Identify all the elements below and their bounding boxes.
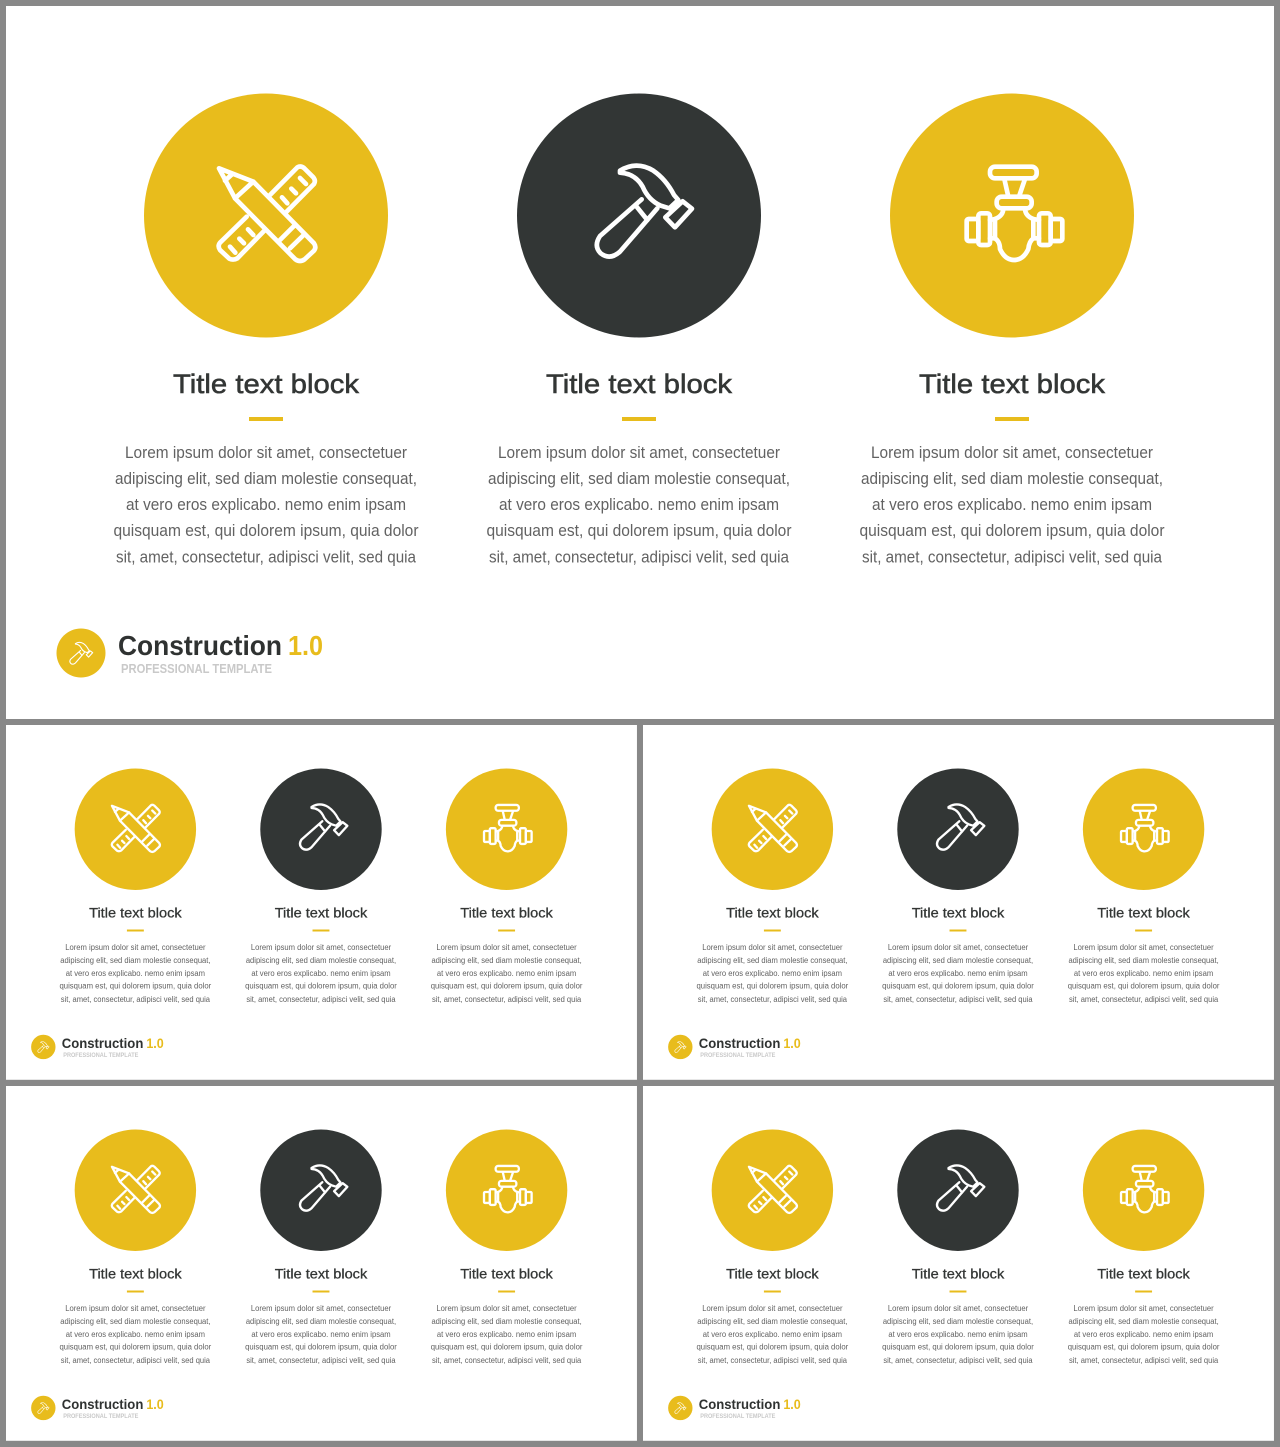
accent bar bbox=[950, 1291, 966, 1293]
brand logo: 1.0 bbox=[783, 1036, 801, 1051]
body text: adipiscing elit, sed diam molestie consequat, bbox=[431, 956, 582, 965]
brand logo bbox=[31, 1396, 164, 1420]
body text: at vero eros explicabo. nemo enim ipsam bbox=[437, 969, 576, 978]
body text bbox=[882, 1304, 1034, 1365]
icon: hammer bbox=[260, 1130, 382, 1251]
body text bbox=[59, 1304, 212, 1365]
icon: hammer bbox=[897, 1130, 1019, 1251]
accent bar bbox=[1135, 1291, 1152, 1293]
heading: Title text block bbox=[460, 1267, 553, 1282]
body text: adipiscing elit, sed diam molestie consequat, bbox=[431, 1317, 582, 1326]
icon: pipe valve bbox=[890, 94, 1134, 338]
body text: at vero eros explicabo. nemo enim ipsam bbox=[703, 969, 842, 978]
body text: Lorem ipsum dolor sit amet, consectetuer bbox=[702, 943, 843, 952]
body text bbox=[486, 444, 792, 566]
body text: quisquam est, qui dolorem ipsum, quia dolor bbox=[882, 1343, 1034, 1352]
icon: pipe valve bbox=[1083, 769, 1204, 890]
heading: Title text block bbox=[919, 369, 1106, 399]
body text: at vero eros explicabo. nemo enim ipsam bbox=[251, 1330, 391, 1339]
body text bbox=[1068, 1304, 1220, 1365]
body text: quisquam est, qui dolorem ipsum, quia dolor bbox=[696, 982, 849, 991]
brand logo: Construction bbox=[62, 1036, 143, 1051]
accent bar bbox=[127, 1291, 144, 1293]
body text: at vero eros explicabo. nemo enim ipsam bbox=[888, 1330, 1028, 1339]
icon: pencil and ruler bbox=[712, 769, 833, 890]
body text bbox=[860, 444, 1165, 566]
column 3: valve bbox=[431, 1130, 583, 1365]
body text: quisquam est, qui dolorem ipsum, quia dolor bbox=[696, 1343, 849, 1352]
body text bbox=[114, 444, 419, 566]
body text: sit, amet, consectetur, adipisci velit, sed quia bbox=[883, 995, 1033, 1004]
column 3: valve bbox=[431, 769, 583, 1004]
brand logo bbox=[31, 1035, 164, 1059]
body text: adipiscing elit, sed diam molestie consequat, bbox=[246, 956, 396, 965]
body text: at vero eros explicabo. nemo enim ipsam bbox=[66, 1330, 205, 1339]
body text: at vero eros explicabo. nemo enim ipsam bbox=[888, 969, 1028, 978]
heading: Title text block bbox=[89, 1267, 182, 1282]
heading: Title text block bbox=[912, 906, 1005, 921]
heading: Title text block bbox=[726, 1267, 819, 1282]
body text: sit, amet, consectetur, adipisci velit, sed quia bbox=[1069, 1356, 1219, 1365]
body text: sit, amet, consectetur, adipisci velit, sed quia bbox=[489, 548, 790, 566]
column 2: hammer bbox=[245, 1130, 397, 1365]
body text: Lorem ipsum dolor sit amet, consectetuer bbox=[1073, 943, 1214, 952]
brand logo: Construction bbox=[699, 1036, 780, 1051]
heading: Title text block bbox=[1097, 906, 1190, 921]
heading: Title text block bbox=[275, 906, 368, 921]
icon: pencil and ruler bbox=[75, 1130, 196, 1251]
icon: pipe valve bbox=[446, 769, 567, 890]
body text: at vero eros explicabo. nemo enim ipsam bbox=[1074, 969, 1213, 978]
body text bbox=[882, 943, 1034, 1004]
body text: adipiscing elit, sed diam molestie consequat, bbox=[60, 1317, 211, 1326]
body text: sit, amet, consectetur, adipisci velit, sed quia bbox=[432, 1356, 582, 1365]
icon: pipe valve bbox=[1083, 1130, 1204, 1251]
body text: adipiscing elit, sed diam molestie consequat, bbox=[883, 956, 1033, 965]
brand logo bbox=[56, 628, 323, 678]
body text bbox=[431, 943, 583, 1004]
brand logo: Construction bbox=[118, 630, 282, 661]
body text: Lorem ipsum dolor sit amet, consectetuer bbox=[702, 1304, 843, 1313]
body text: quisquam est, qui dolorem ipsum, quia dolor bbox=[59, 1343, 212, 1352]
body text: sit, amet, consectetur, adipisci velit, sed quia bbox=[698, 1356, 847, 1365]
body text: Lorem ipsum dolor sit amet, consectetuer bbox=[871, 444, 1153, 462]
column 3: valve bbox=[1068, 769, 1220, 1004]
accent bar bbox=[313, 1291, 329, 1293]
body text: at vero eros explicabo. nemo enim ipsam bbox=[1074, 1330, 1213, 1339]
brand logo bbox=[668, 1035, 801, 1059]
body text: adipiscing elit, sed diam molestie consequat, bbox=[697, 956, 848, 965]
body text: at vero eros explicabo. nemo enim ipsam bbox=[703, 1330, 842, 1339]
body text bbox=[696, 943, 849, 1004]
brand logo: PROFESSIONAL TEMPLATE bbox=[700, 1052, 775, 1059]
body text bbox=[431, 1304, 583, 1365]
panel: large slide bbox=[6, 6, 1274, 719]
body text: Lorem ipsum dolor sit amet, consectetuer bbox=[251, 943, 391, 952]
body text bbox=[696, 1304, 849, 1365]
heading: Title text block bbox=[912, 1267, 1005, 1282]
heading: Title text block bbox=[89, 906, 182, 921]
body text: adipiscing elit, sed diam molestie consequat, bbox=[883, 1317, 1033, 1326]
body text: Lorem ipsum dolor sit amet, consectetuer bbox=[436, 943, 577, 952]
accent bar bbox=[950, 930, 966, 932]
column 1: pencil and ruler bbox=[696, 769, 849, 1004]
column 2: hammer bbox=[245, 769, 397, 1004]
brand logo: 1.0 bbox=[783, 1397, 801, 1412]
icon: pencil and ruler bbox=[712, 1130, 833, 1251]
accent bar bbox=[498, 930, 515, 932]
column 1: pencil and ruler bbox=[59, 1130, 212, 1365]
panel: small slide bottom right bbox=[643, 1086, 1274, 1441]
icon: pipe valve bbox=[446, 1130, 567, 1251]
column 1: pencil and ruler bbox=[59, 769, 212, 1004]
accent bar bbox=[313, 930, 329, 932]
heading: Title text block bbox=[173, 369, 360, 399]
body text: Lorem ipsum dolor sit amet, consectetuer bbox=[1073, 1304, 1214, 1313]
column 2: hammer bbox=[882, 769, 1034, 1004]
body text: sit, amet, consectetur, adipisci velit, sed quia bbox=[61, 995, 210, 1004]
body text: Lorem ipsum dolor sit amet, consectetuer bbox=[125, 444, 407, 462]
body text: Lorem ipsum dolor sit amet, consectetuer bbox=[498, 444, 780, 462]
heading: Title text block bbox=[275, 1267, 368, 1282]
heading: Title text block bbox=[1097, 1267, 1190, 1282]
brand logo: PROFESSIONAL TEMPLATE bbox=[63, 1052, 138, 1059]
body text: Lorem ipsum dolor sit amet, consectetuer bbox=[251, 1304, 391, 1313]
body text: at vero eros explicabo. nemo enim ipsam bbox=[499, 496, 779, 514]
body text bbox=[1068, 943, 1220, 1004]
panel: small slide top left bbox=[6, 725, 637, 1080]
body text: sit, amet, consectetur, adipisci velit, sed quia bbox=[246, 995, 396, 1004]
icon: hammer bbox=[260, 769, 382, 890]
body text: sit, amet, consectetur, adipisci velit, sed quia bbox=[61, 1356, 210, 1365]
body text: at vero eros explicabo. nemo enim ipsam bbox=[126, 496, 406, 514]
accent bar bbox=[498, 1291, 515, 1293]
brand logo: 1.0 bbox=[288, 630, 323, 661]
accent bar bbox=[764, 1291, 781, 1293]
accent bar bbox=[1135, 930, 1152, 932]
accent bar bbox=[622, 417, 656, 421]
body text: Lorem ipsum dolor sit amet, consectetuer bbox=[888, 1304, 1028, 1313]
panel: small slide bottom left bbox=[6, 1086, 637, 1441]
body text: Lorem ipsum dolor sit amet, consectetuer bbox=[436, 1304, 577, 1313]
body text: quisquam est, qui dolorem ipsum, quia dolor bbox=[1068, 1343, 1220, 1352]
body text: at vero eros explicabo. nemo enim ipsam bbox=[66, 969, 205, 978]
column 1: pencil and ruler bbox=[114, 94, 419, 566]
heading: Title text block bbox=[546, 369, 733, 399]
body text: quisquam est, qui dolorem ipsum, quia dolor bbox=[245, 982, 397, 991]
brand logo bbox=[668, 1396, 801, 1420]
column 1: pencil and ruler bbox=[696, 1130, 849, 1365]
body text: adipiscing elit, sed diam molestie consequat, bbox=[861, 470, 1163, 488]
body text: sit, amet, consectetur, adipisci velit, sed quia bbox=[246, 1356, 396, 1365]
brand logo: 1.0 bbox=[146, 1397, 164, 1412]
brand logo: PROFESSIONAL TEMPLATE bbox=[700, 1413, 775, 1420]
body text: Lorem ipsum dolor sit amet, consectetuer bbox=[65, 1304, 206, 1313]
body text: at vero eros explicabo. nemo enim ipsam bbox=[251, 969, 391, 978]
heading: Title text block bbox=[460, 906, 553, 921]
body text: quisquam est, qui dolorem ipsum, quia dolor bbox=[860, 522, 1165, 540]
body text: adipiscing elit, sed diam molestie consequat, bbox=[115, 470, 417, 488]
column 2: hammer bbox=[882, 1130, 1034, 1365]
body text: quisquam est, qui dolorem ipsum, quia dolor bbox=[59, 982, 212, 991]
icon: pencil and ruler bbox=[144, 94, 388, 338]
body text: quisquam est, qui dolorem ipsum, quia dolor bbox=[114, 522, 419, 540]
body text: quisquam est, qui dolorem ipsum, quia dolor bbox=[1068, 982, 1220, 991]
column 3: valve bbox=[1068, 1130, 1220, 1365]
body text: adipiscing elit, sed diam molestie consequat, bbox=[1068, 956, 1219, 965]
body text: quisquam est, qui dolorem ipsum, quia dolor bbox=[486, 522, 792, 540]
brand logo: 1.0 bbox=[146, 1036, 164, 1051]
accent bar bbox=[995, 417, 1029, 421]
body text: adipiscing elit, sed diam molestie consequat, bbox=[488, 470, 790, 488]
body text: adipiscing elit, sed diam molestie consequat, bbox=[697, 1317, 848, 1326]
body text: sit, amet, consectetur, adipisci velit, sed quia bbox=[432, 995, 582, 1004]
body text: quisquam est, qui dolorem ipsum, quia dolor bbox=[431, 982, 583, 991]
body text bbox=[245, 943, 397, 1004]
icon: hammer bbox=[897, 769, 1019, 890]
body text: Lorem ipsum dolor sit amet, consectetuer bbox=[888, 943, 1028, 952]
accent bar bbox=[249, 417, 283, 421]
body text: sit, amet, consectetur, adipisci velit, sed quia bbox=[883, 1356, 1033, 1365]
body text: adipiscing elit, sed diam molestie consequat, bbox=[1068, 1317, 1219, 1326]
body text: at vero eros explicabo. nemo enim ipsam bbox=[872, 496, 1152, 514]
heading: Title text block bbox=[726, 906, 819, 921]
icon: pencil and ruler bbox=[75, 769, 196, 890]
body text bbox=[245, 1304, 397, 1365]
accent bar bbox=[764, 930, 781, 932]
body text: at vero eros explicabo. nemo enim ipsam bbox=[437, 1330, 576, 1339]
brand logo: PROFESSIONAL TEMPLATE bbox=[121, 662, 272, 676]
icon: hammer bbox=[517, 94, 761, 338]
body text: quisquam est, qui dolorem ipsum, quia dolor bbox=[245, 1343, 397, 1352]
accent bar bbox=[127, 930, 144, 932]
brand logo: Construction bbox=[62, 1397, 143, 1412]
body text: quisquam est, qui dolorem ipsum, quia dolor bbox=[431, 1343, 583, 1352]
body text: Lorem ipsum dolor sit amet, consectetuer bbox=[65, 943, 206, 952]
body text: quisquam est, qui dolorem ipsum, quia dolor bbox=[882, 982, 1034, 991]
body text: sit, amet, consectetur, adipisci velit, sed quia bbox=[116, 548, 417, 566]
brand logo: Construction bbox=[699, 1397, 780, 1412]
body text: adipiscing elit, sed diam molestie consequat, bbox=[246, 1317, 396, 1326]
brand logo: PROFESSIONAL TEMPLATE bbox=[63, 1413, 138, 1420]
body text: adipiscing elit, sed diam molestie consequat, bbox=[60, 956, 211, 965]
column 2: hammer bbox=[486, 94, 792, 566]
body text: sit, amet, consectetur, adipisci velit, sed quia bbox=[862, 548, 1163, 566]
panel: small slide top right bbox=[643, 725, 1274, 1080]
body text: sit, amet, consectetur, adipisci velit, sed quia bbox=[1069, 995, 1219, 1004]
body text bbox=[59, 943, 212, 1004]
body text: sit, amet, consectetur, adipisci velit, sed quia bbox=[698, 995, 847, 1004]
column 3: valve bbox=[860, 94, 1165, 566]
